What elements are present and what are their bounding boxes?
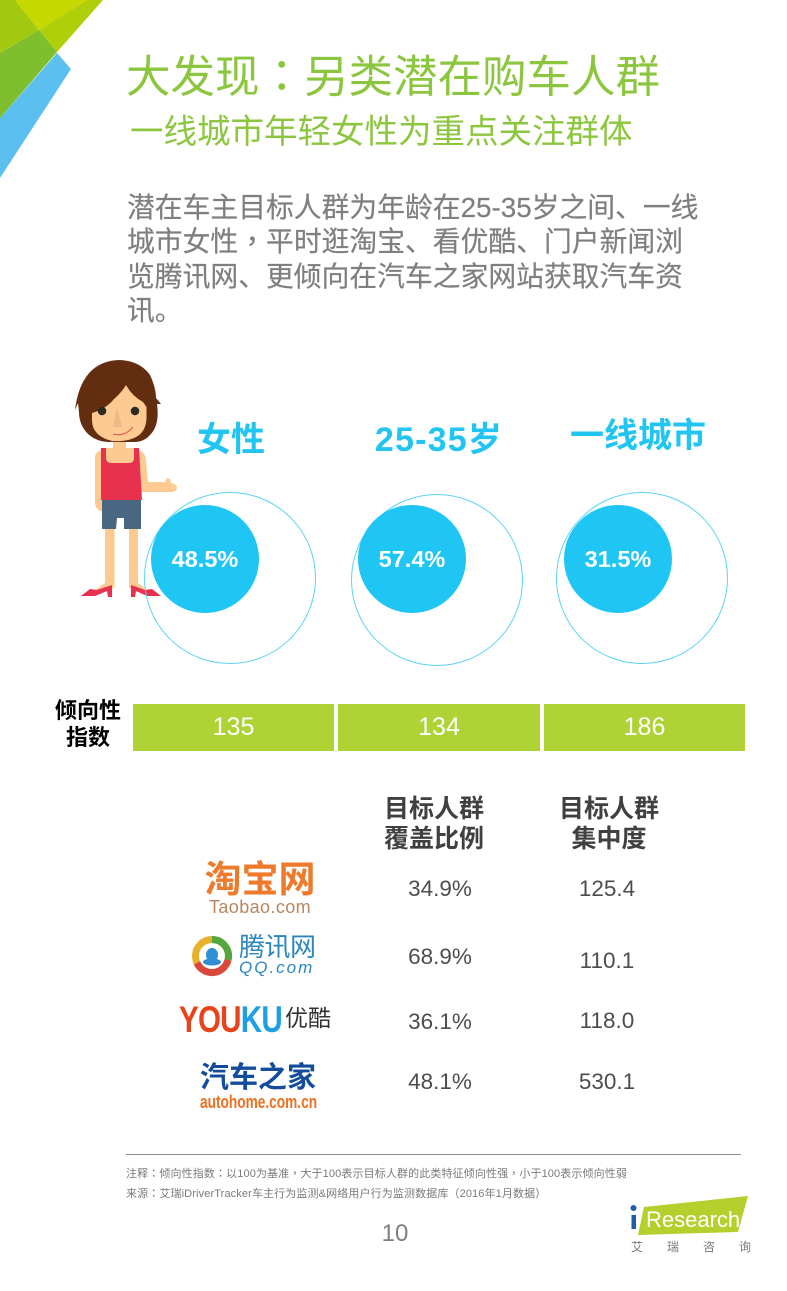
circle chart: 25-35岁 57.4%: 57.4%: [379, 546, 445, 572]
column heading: 目标人群集中度: 集中度: [571, 825, 646, 853]
logo: Autohome: 汽车之家: [200, 1062, 316, 1094]
stat label: 女性: 女性: [197, 421, 265, 459]
logo: Autohome: [200, 1062, 317, 1112]
row label: 倾向性指数: [55, 698, 121, 750]
logo: QQ.com: QQ.com: [239, 958, 314, 977]
intro text block: 讯。: [127, 295, 183, 326]
table row 2: concentration: 110.1: [580, 948, 634, 973]
table row 1: concentration: 125.4: [579, 876, 635, 901]
logo: Youku: [179, 999, 331, 1040]
index bar: 135: [133, 704, 334, 751]
circle chart: 女性 48.5%: 48.5%: [172, 546, 238, 572]
intro text block: 城市女性，平时逛淘宝、看优酷、门户新闻浏: [127, 220, 683, 260]
stat label: 25-35岁: 25-35岁: [375, 421, 503, 459]
logo: Taobao: Taobao.com: [209, 897, 311, 917]
logo: Youku: 优酷: [285, 1005, 331, 1031]
logo: Taobao: 淘宝网: [204, 859, 316, 900]
table row 2: coverage: 68.9%: [408, 944, 472, 969]
title: 大发现：另类潜在购车人群: [126, 40, 660, 105]
row label: 倾向性指数: 指数: [66, 725, 110, 750]
index bar: 186: 186: [624, 713, 665, 741]
intro text block: [127, 192, 698, 326]
table row 3: concentration: 118.0: [580, 1008, 634, 1033]
column heading: 目标人群覆盖比例: 目标人群: [384, 795, 484, 823]
page number: 10: [382, 1220, 408, 1247]
circle chart: 25-35岁 57.4%: [351, 494, 523, 666]
footnote: [126, 1165, 627, 1201]
table row 1: coverage: 34.9%: [408, 876, 472, 901]
intro text block: 览腾讯网、更倾向在汽车之家网站获取汽车资: [127, 261, 683, 292]
index bar: 135: 135: [213, 713, 254, 741]
column heading: 目标人群覆盖比例: 覆盖比例: [384, 825, 484, 853]
table row 4: concentration: 530.1: [579, 1069, 635, 1094]
icon: woman figure: [75, 360, 177, 597]
index bar: 186: [544, 704, 745, 751]
corner decoration: [0, 0, 103, 178]
column heading: 目标人群集中度: 目标人群: [559, 795, 659, 823]
logo: iResearch: Research: [646, 1207, 740, 1232]
circle chart: 一线城市 31.5%: 31.5%: [585, 546, 651, 572]
logo: QQ.com: [192, 932, 316, 977]
table row 4: coverage: 48.1%: [408, 1069, 472, 1094]
index bar: 134: [338, 704, 540, 751]
logo: Youku: YOUKU: [179, 999, 282, 1040]
stat label: 一线城市: 一线城市: [570, 417, 706, 455]
column heading: 目标人群集中度: [559, 795, 659, 853]
index bar: 134: 134: [418, 713, 460, 741]
logo: iResearch: 艾瑞咨询: [631, 1240, 775, 1254]
logo: iResearch: [630, 1196, 775, 1254]
row label: 倾向性指数: 倾向性: [55, 698, 121, 723]
subtitle: 一线城市年轻女性为重点关注群体: [130, 114, 632, 151]
intro text block: 潜在车主目标人群为年龄在25-35岁之间、一线: [127, 192, 698, 223]
table row 3: coverage: 36.1%: [408, 1009, 472, 1034]
logo: Autohome: autohome.com.cn: [200, 1092, 317, 1112]
logo: QQ.com: 腾讯网: [239, 932, 316, 962]
circle chart: 女性 48.5%: [144, 492, 316, 664]
circle chart: 一线城市 31.5%: [556, 492, 728, 664]
footnote: 注释：倾向性指数：以100为基准，大于100表示目标人群的此类特征倾向性强，小于100表示倾向性弱: [126, 1165, 627, 1181]
footnote: 来源：艾瑞iDriverTracker车主行为监测&网络用户行为监测数据库（2016年1月数据）: [126, 1185, 546, 1201]
column heading: 目标人群覆盖比例: [384, 795, 484, 853]
